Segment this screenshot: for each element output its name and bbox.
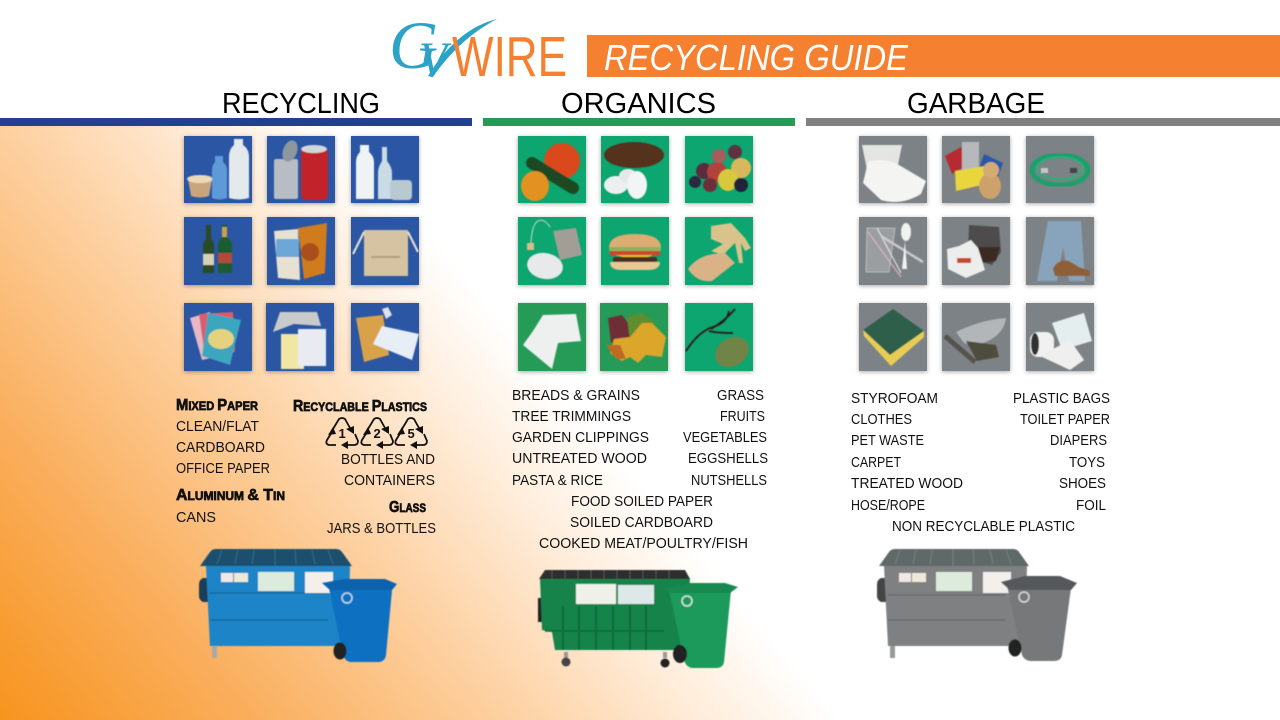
icon: newspaper and office paper <box>266 303 334 371</box>
green dumpster <box>538 570 690 668</box>
recycling list: CANS <box>176 509 216 526</box>
recycling list: GLASS <box>389 499 426 516</box>
icon: wine and beer bottles <box>184 217 252 285</box>
panel: organics <box>483 88 795 668</box>
logo: GV Wire <box>389 7 567 89</box>
icon: magazines <box>184 303 252 371</box>
grey dumpster <box>877 549 1029 658</box>
organics list: BREADS & GRAINS <box>512 387 640 404</box>
garbage list: TREATED WOOD <box>851 475 963 492</box>
garbage list: CARPET <box>851 454 901 471</box>
icon: toilet paper and diapers <box>1026 303 1094 371</box>
icon: tree branch and leaves <box>685 303 755 373</box>
recycling colour bar <box>0 118 472 126</box>
recycling list: CONTAINERS <box>344 472 435 489</box>
icon: recycling code 2: 2 <box>374 426 381 441</box>
garbage list: CLOTHES <box>851 411 912 428</box>
recycling list: BOTTLES AND <box>341 451 435 468</box>
icon: garden hose <box>1026 136 1094 203</box>
icon: recycling code 5: 5 <box>408 426 415 441</box>
logo: GV Wire: WIRE <box>452 25 567 89</box>
icon: cardboard box <box>351 217 419 285</box>
recycling list: ALUMINUM & TIN <box>176 487 285 504</box>
icon: hamburger <box>601 217 669 285</box>
organics list: FRUITS <box>720 408 765 425</box>
organics list: GARDEN CLIPPINGS <box>512 429 649 446</box>
garbage list: SHOES <box>1059 475 1106 492</box>
logo: GV Wire: G <box>389 7 438 83</box>
organics list: GRASS <box>717 387 764 404</box>
organics list: PASTA & RICE <box>512 472 603 489</box>
organics list: SOILED CARDBOARD <box>570 514 713 531</box>
grey cart <box>1001 576 1077 661</box>
garbage list: STYROFOAM <box>851 390 938 407</box>
garbage colour bar <box>806 118 1280 126</box>
panel: garbage <box>806 88 1280 661</box>
icon: envelopes <box>351 303 419 371</box>
garbage list <box>851 390 1110 535</box>
icon: coffee and eggs <box>601 136 669 203</box>
icon: plastic bags <box>942 217 1010 285</box>
organics colour bar <box>483 118 795 126</box>
blue dumpster <box>199 549 352 658</box>
icon: autumn leaves <box>600 303 668 371</box>
recycling list <box>176 397 436 537</box>
icon: recycling code 2 <box>361 418 393 449</box>
organics list: NUTSHELLS <box>691 472 767 489</box>
garbage list: PET WASTE <box>851 432 924 449</box>
recycling list: CLEAN/FLAT <box>176 418 259 435</box>
blue cart <box>322 579 397 662</box>
heading: garbage: GARBAGE <box>907 88 1045 120</box>
organics list: FOOD SOILED PAPER <box>571 493 713 510</box>
organics list: UNTREATED WOOD <box>512 450 647 467</box>
icon: fruits <box>685 136 753 203</box>
recycling list: MIXED PAPER <box>176 397 258 414</box>
recycling list: JARS & BOTTLES <box>327 520 436 537</box>
recycling list: CARDBOARD <box>176 439 265 456</box>
icon: recycling code 1: 1 <box>338 426 346 441</box>
green cart <box>663 583 738 668</box>
organics list <box>512 387 768 552</box>
icon: jeans and shoe <box>1026 217 1094 285</box>
garbage list: PLASTIC BAGS <box>1013 390 1110 407</box>
organics list: COOKED MEAT/POULTRY/FISH <box>539 535 748 552</box>
title banner: RECYCLING GUIDE <box>604 37 909 78</box>
icon: metal and soda cans <box>267 136 335 203</box>
icon: vegetables <box>518 136 586 203</box>
icon: toys and teddy bear <box>942 136 1010 203</box>
heading: organics: ORGANICS <box>561 88 716 120</box>
icon: plastic tub and bottles <box>184 136 252 203</box>
garbage list: TOYS <box>1069 454 1105 471</box>
heading: recycling: RECYCLING <box>222 88 380 120</box>
icon: styrofoam <box>859 136 927 203</box>
icon: paper napkins <box>518 303 586 371</box>
icon: sponge <box>859 303 927 371</box>
icon: cereal boxes <box>267 217 335 285</box>
icon: pasta and bread <box>685 217 753 285</box>
title banner <box>587 35 1280 78</box>
icon: tea bag and coffee filter <box>518 217 586 285</box>
icon: foil and pie tin <box>942 303 1010 371</box>
logo: GV Wire: V <box>419 31 452 87</box>
garbage list: NON RECYCLABLE PLASTIC <box>892 518 1075 535</box>
panel: recycling <box>0 88 472 662</box>
garbage list: TOILET PAPER <box>1020 411 1110 428</box>
icon: plastic cup and cutlery <box>859 217 927 285</box>
icon: recycling code 1 <box>326 418 358 449</box>
icon: glass bottles and jar <box>351 136 419 203</box>
recycling list: OFFICE PAPER <box>176 460 270 477</box>
recycling list: RECYCLABLE PLASTICS <box>293 398 427 415</box>
garbage list: DIAPERS <box>1050 432 1107 449</box>
icon: recycling code 5 <box>395 418 427 449</box>
organics list: VEGETABLES <box>683 429 767 446</box>
organics list: TREE TRIMMINGS <box>512 408 631 425</box>
organics list: EGGSHELLS <box>688 450 768 467</box>
garbage list: FOIL <box>1076 497 1106 514</box>
garbage list: HOSE/ROPE <box>851 497 925 514</box>
